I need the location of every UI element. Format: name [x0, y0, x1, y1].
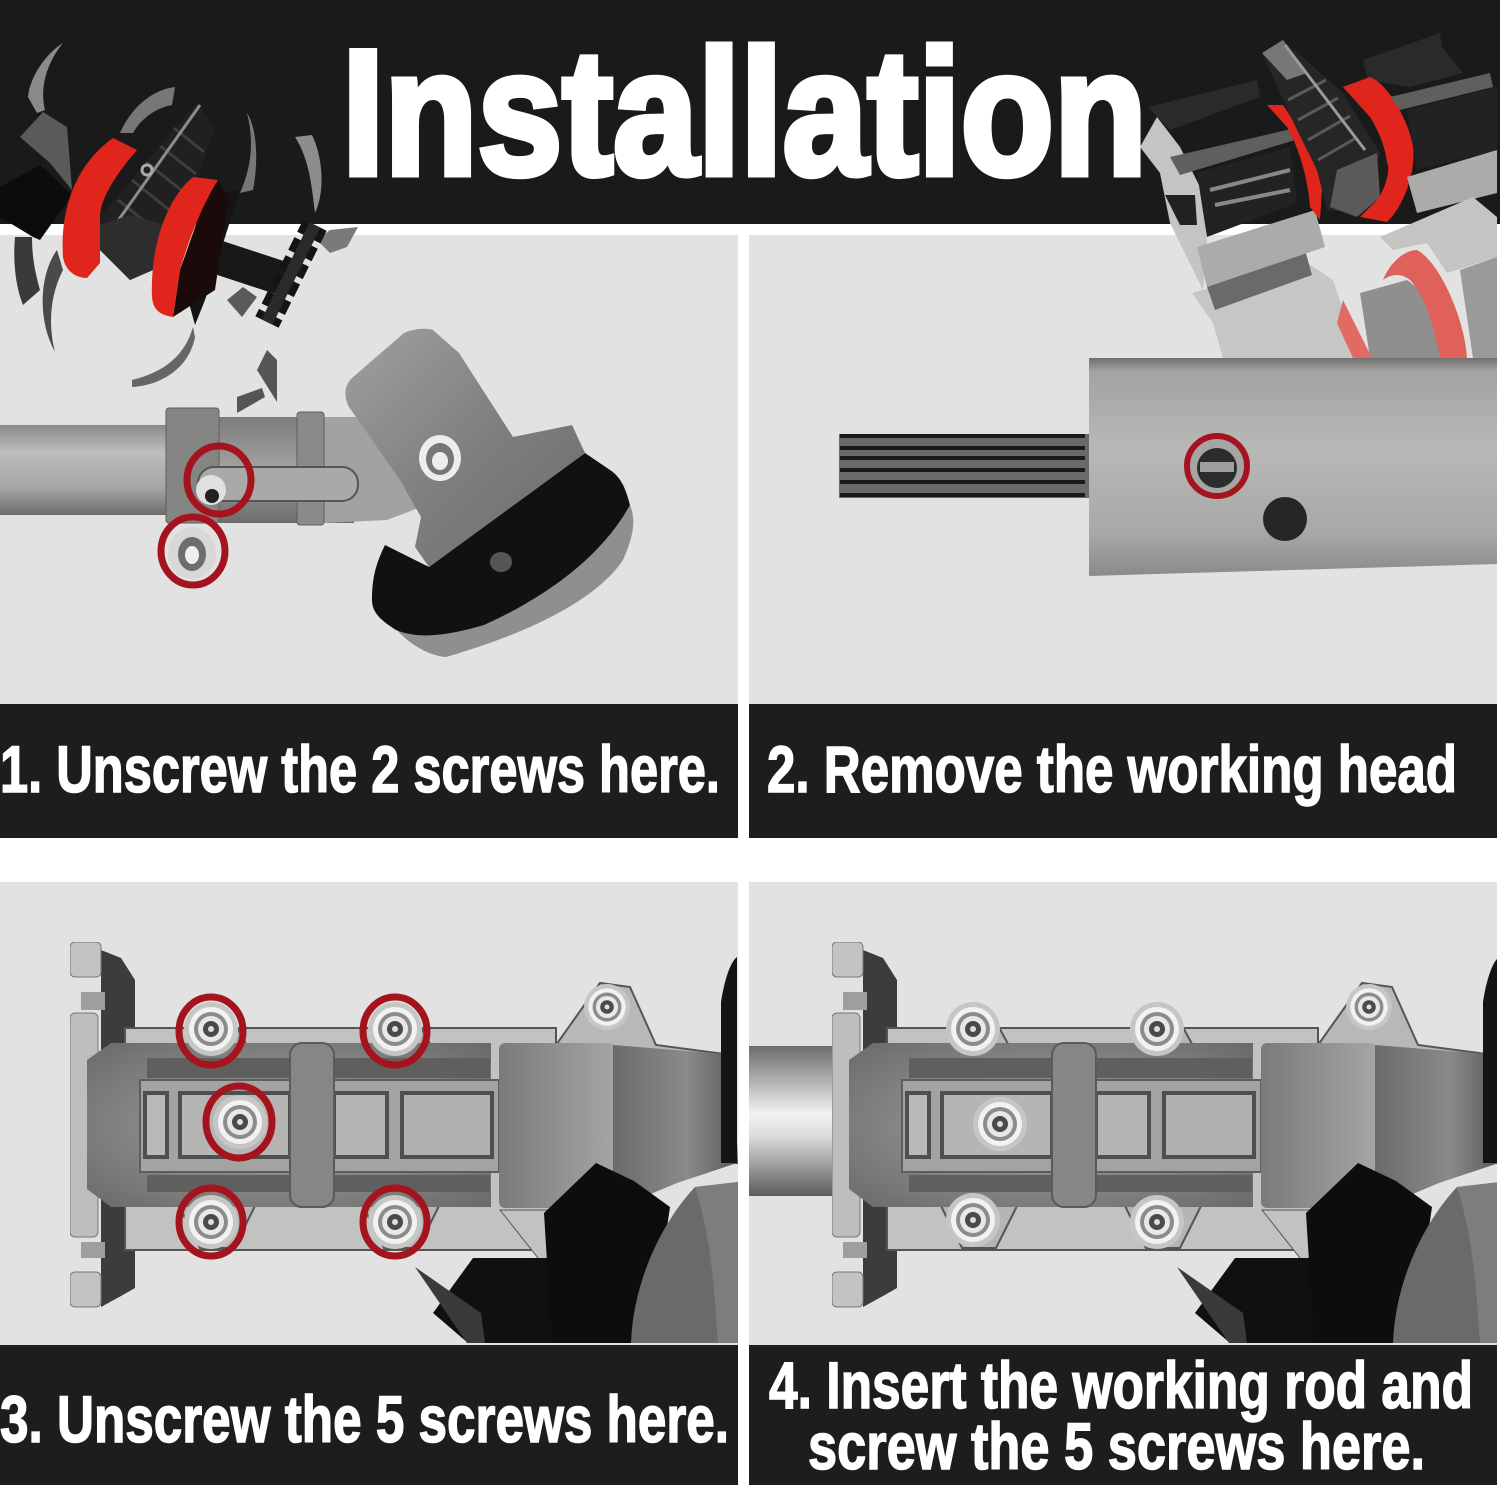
red marker circles: [161, 446, 251, 585]
caption: step 3: 3. Unscrew the 5 screws here.: [0, 1382, 729, 1456]
panel: step 3: [0, 882, 738, 1345]
title: Installation: [342, 13, 1147, 212]
red marker circles: [179, 997, 427, 1256]
panel: step 4: [749, 882, 1500, 1345]
tiller illustration right: [1140, 33, 1497, 358]
caption: step 1: 1. Unscrew the 2 screws here.: [0, 732, 720, 806]
panel: step 2: [749, 235, 1497, 704]
caption bars: [0, 704, 1497, 1485]
illustration: gearbox with 5 highlighted screws: [70, 942, 738, 1343]
illustration: gearbox with rod inserted: [749, 942, 1500, 1343]
illustration: drive shaft and tube: [839, 358, 1497, 576]
tiller illustration left: [0, 43, 358, 413]
caption: step 4: [769, 1348, 1473, 1483]
header band: [0, 0, 1500, 224]
panel: step 1: [0, 235, 738, 704]
illustration: trimmer gearbox with two highlighted screws: [0, 329, 633, 657]
